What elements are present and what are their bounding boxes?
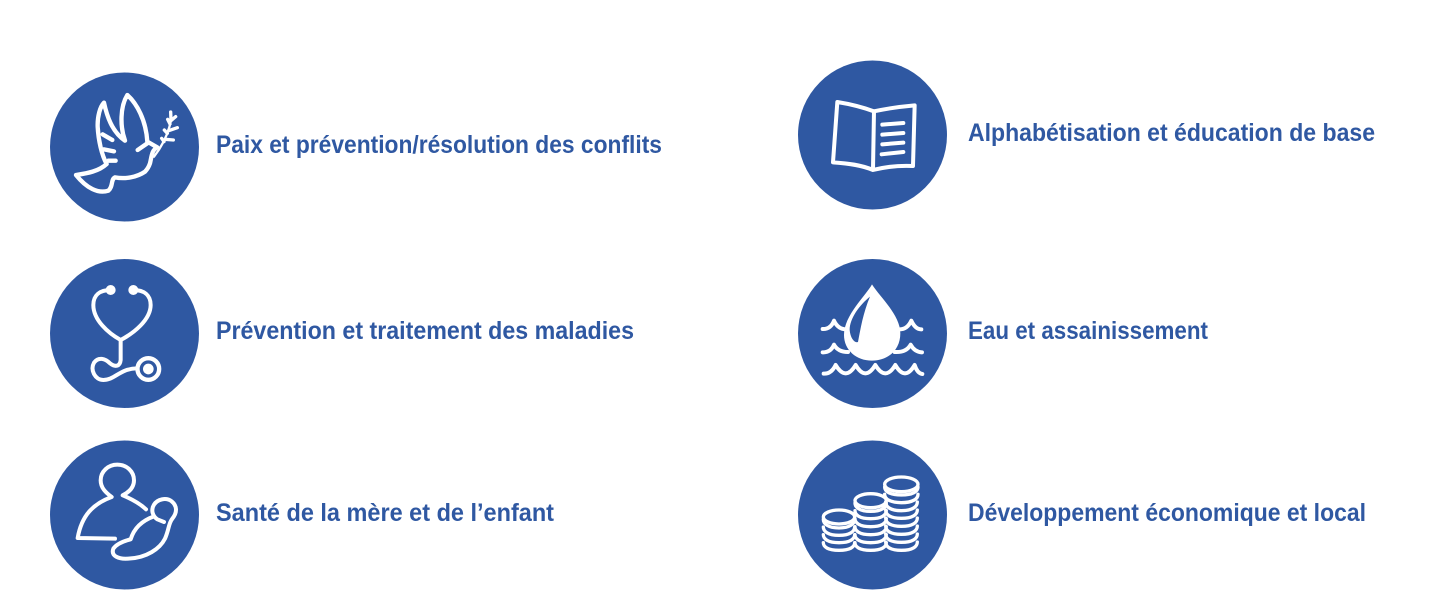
label: Développement économique et local [968, 499, 1366, 527]
icon: stethoscope [50, 259, 199, 408]
item: peace and conflict resolution [50, 72, 662, 222]
item: water and sanitation [798, 259, 1209, 408]
item: economic and local development [798, 440, 1366, 590]
label: Alphabétisation et éducation de base [968, 119, 1375, 147]
icon: open book [798, 60, 947, 210]
icon: water drop and waves [798, 259, 947, 408]
icon: dove with olive branch [50, 72, 199, 222]
label: Santé de la mère et de l’enfant [216, 499, 555, 527]
icon: stacks of coins [798, 440, 947, 590]
label: Paix et prévention/résolution des conflits [216, 131, 662, 159]
label: Eau et assainissement [968, 317, 1209, 345]
item: mother and child health [50, 440, 555, 590]
icon: mother and baby [50, 440, 199, 590]
item: literacy and basic education [798, 60, 1375, 210]
item: disease prevention and treatment [50, 259, 634, 408]
label: Prévention et traitement des maladies [216, 317, 634, 345]
